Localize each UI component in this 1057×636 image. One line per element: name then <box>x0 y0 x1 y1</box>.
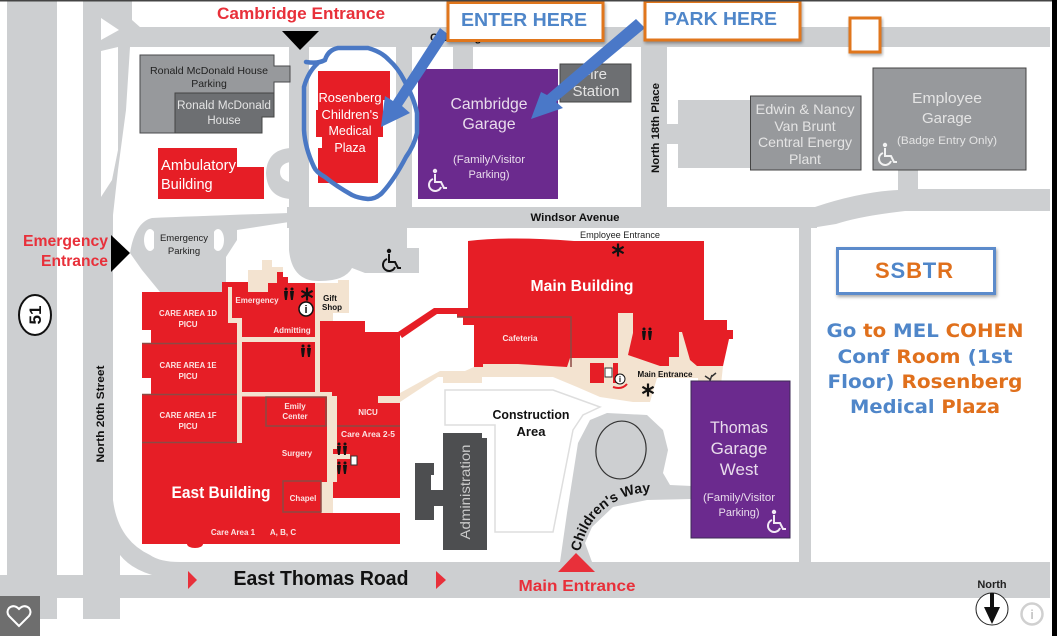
building: Employee Garage: (Badge Entry Only) <box>897 135 997 147</box>
building: Rosenberg Children's Medical Plaza: Rosenberg <box>318 91 382 105</box>
building: Ronald McDonald House Parking: Ronald McDonald House <box>150 65 268 77</box>
icon: east information: i <box>304 304 308 316</box>
cafeteria outline <box>457 317 571 367</box>
route 51 shield <box>19 295 51 335</box>
label: Emergency Parking: Emergency <box>160 233 208 244</box>
callout: ENTER HERE: ENTER HERE <box>461 10 587 30</box>
building: Van Brunt Central Energy Plant: Central Energy <box>758 134 852 150</box>
callout: SSBTR <box>838 248 994 294</box>
icon: east elevator <box>351 456 357 465</box>
direction arrows on East Thomas Road <box>188 571 446 589</box>
street label: Cambridge Avenue: Cambridge Avenue <box>430 32 529 44</box>
east building labels <box>159 296 396 537</box>
arrow: enter here <box>381 28 449 127</box>
directions text: Medical Plaza <box>850 396 1000 418</box>
icon: main information <box>615 374 625 384</box>
label: Emergency Parking: Parking <box>168 246 200 257</box>
route 51 shield: 51 <box>26 306 45 324</box>
icon: employee asterisk <box>612 244 624 256</box>
building: Ronald McDonald House Parking: Parking <box>191 78 227 90</box>
street label: North 20th Street: North 20th Street <box>95 365 107 463</box>
building: Ambulatory <box>158 148 264 199</box>
construction area: Construction <box>492 407 570 422</box>
label: Emergency Parking <box>160 233 208 257</box>
building: Thomas Garage West: Garage <box>711 439 767 458</box>
label: Gift Shop: Gift <box>323 294 337 303</box>
icon: tree mark <box>705 373 716 383</box>
building: Ronald McDonald House Parking <box>140 55 290 133</box>
construction area <box>445 390 600 532</box>
building: Main Building: Main Building <box>530 278 634 295</box>
east building labels: PICU <box>178 320 198 329</box>
construction area: Area <box>517 424 546 439</box>
top dark edge <box>0 0 1052 2</box>
building: Van Brunt Central Energy Plant: Edwin & Nancy <box>756 101 854 117</box>
north compass <box>976 579 1008 625</box>
icon: accessible parking <box>383 250 401 271</box>
east building labels: Center <box>282 412 308 421</box>
east building dividers <box>142 344 400 512</box>
right black edge <box>1052 0 1057 636</box>
building: Administration <box>415 433 487 550</box>
building: Thomas Garage West: Thomas <box>710 418 768 437</box>
directions text: Go to MEL COHEN <box>826 320 1024 342</box>
building: Van Brunt Central Energy Plant <box>750 96 861 170</box>
label: Gift Shop <box>322 294 342 312</box>
east building labels: CARE AREA 1E <box>160 361 217 370</box>
roundabout on Children's Way <box>592 418 650 482</box>
building: Rosenberg Children's Medical Plaza: Children's <box>322 108 378 122</box>
icon: main building restroom <box>642 328 652 340</box>
label: Cambridge Entrance: Cambridge Entrance <box>217 4 385 23</box>
building: Administration: Administration <box>457 444 473 540</box>
east building labels: Care Area 2-5 <box>341 430 396 439</box>
building: Thomas Garage West: (Family/Visitor <box>703 492 775 504</box>
east building labels: CARE AREA 1D <box>159 309 217 318</box>
icons: east building restrooms <box>284 288 347 474</box>
street label: North 18th Place: North 18th Place <box>650 83 662 173</box>
east building labels: East Building <box>172 483 270 502</box>
street label: Windsor Avenue: Windsor Avenue <box>530 212 620 224</box>
building: Rosenberg Children's Medical Plaza: Medical <box>328 124 372 138</box>
callout: ENTER HERE <box>448 2 603 40</box>
directions text: Floor) Rosenberg <box>828 371 1022 393</box>
building: Main Building <box>398 238 733 402</box>
building: Van Brunt Central Energy Plant: Plant <box>789 151 821 167</box>
building: Rosenberg Children's Medical Plaza: Plaza <box>334 141 366 155</box>
building: Ambulatory: Building <box>161 177 213 193</box>
label: Employee Entrance: Employee Entrance <box>580 230 660 240</box>
building: Fire Station <box>560 64 631 102</box>
empty orange box <box>850 18 880 52</box>
street label: East Thomas Road: East Thomas Road <box>234 568 408 590</box>
callout: PARK HERE <box>645 2 800 40</box>
east building labels: Admitting <box>273 326 311 335</box>
east building labels: CARE AREA 1F <box>160 411 217 420</box>
building: Main Building: Cafeteria <box>502 334 538 343</box>
building: Employee Garage: Employee <box>912 90 982 107</box>
building: Ambulatory: Ambulatory <box>161 158 237 174</box>
faint info icon <box>1022 604 1042 624</box>
label: Main Entrance: Main Entrance <box>518 578 636 595</box>
building: Cambridge Garage: Parking) <box>469 169 509 181</box>
building: Thomas Garage West <box>691 381 790 538</box>
east building labels: Emergency <box>235 296 279 305</box>
east building corridors <box>228 260 400 513</box>
hand-drawn circle around Rosenberg Plaza <box>304 48 417 199</box>
building: Cambridge Garage <box>418 69 558 199</box>
building: Van Brunt Central Energy Plant: Van Brunt <box>774 118 836 134</box>
callout: PARK HERE: PARK HERE <box>664 9 777 29</box>
east building labels: PICU <box>178 422 198 431</box>
building: Employee Garage: Garage <box>922 110 972 127</box>
icon: east asterisk entrance <box>301 288 313 300</box>
building: Cambridge Garage: (Family/Visitor <box>453 154 525 166</box>
building: Fire Station: Station <box>572 83 620 100</box>
building: Thomas Garage West: West <box>720 460 758 479</box>
building: Cambridge Garage: Cambridge <box>450 96 528 113</box>
east building labels: Surgery <box>282 449 313 458</box>
east building labels: Emily <box>284 402 306 411</box>
icon: main information: i <box>619 375 621 384</box>
east building labels: Chapel <box>290 494 316 503</box>
building: Ronald McDonald House: House <box>207 115 241 127</box>
building: Employee Garage <box>873 68 1026 170</box>
callout: SSBTR: SSBTR <box>875 258 953 283</box>
label: Cambridge Entrance <box>217 4 385 50</box>
arrow: park here <box>531 19 645 119</box>
label: Gift Shop: Shop <box>322 303 342 312</box>
label: Emergency Entrance: Emergency <box>23 233 108 250</box>
building: East Building <box>142 260 400 548</box>
directions text <box>826 320 1024 418</box>
main concourse <box>400 313 723 402</box>
building: Fire Station: Fire <box>581 66 607 83</box>
favorite heart button <box>0 596 40 636</box>
building: Thomas Garage West: Parking) <box>719 507 759 519</box>
icon: east information <box>299 302 313 316</box>
label: Main Entrance small: Main Entrance <box>638 370 693 379</box>
building: Ronald McDonald House <box>175 93 274 133</box>
label: Emergency Entrance <box>23 233 130 272</box>
label: Children's Way: Children's Way <box>572 484 650 550</box>
east building labels: A, B, C <box>270 528 296 537</box>
faint info icon: i <box>1030 607 1034 622</box>
icon: main asterisk <box>642 384 654 396</box>
white road islands <box>101 18 224 575</box>
north compass: North <box>977 579 1007 591</box>
building: Rosenberg Children's Medical Plaza <box>316 71 390 183</box>
label: Main Entrance <box>518 553 636 595</box>
directions text: Conf Room (1st <box>838 346 1012 368</box>
east building labels: NICU <box>358 408 378 417</box>
east building labels: Care Area 1 <box>211 528 256 537</box>
building: Ronald McDonald House: Ronald McDonald <box>177 100 271 112</box>
east building labels: PICU <box>178 372 198 381</box>
label: Emergency Entrance: Entrance <box>41 253 108 270</box>
building: Cambridge Garage: Garage <box>462 116 516 133</box>
